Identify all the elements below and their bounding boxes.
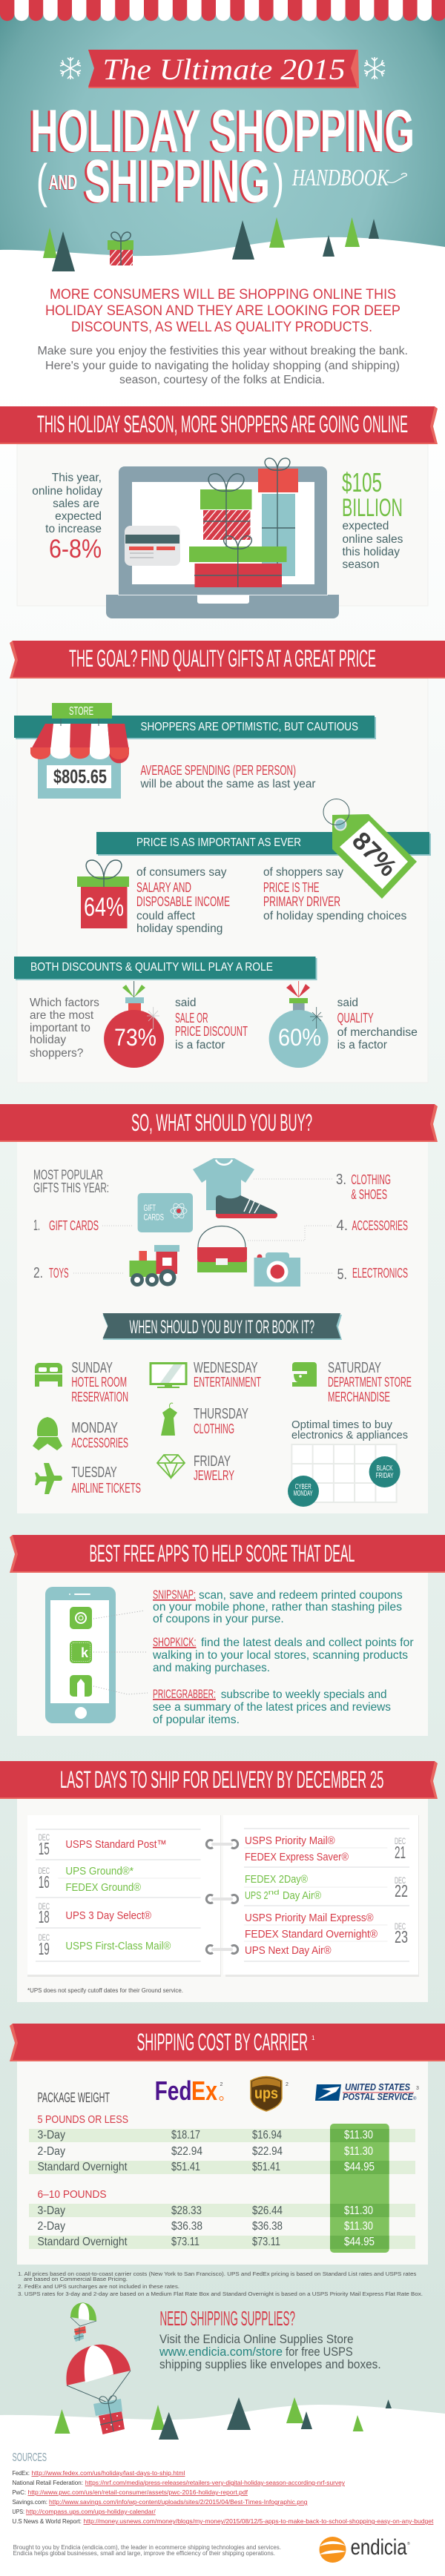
text: price primary driver: of holiday spending choices (263, 910, 407, 922)
icon: large parachute (66, 2345, 131, 2434)
calendar rings (206, 1840, 238, 1953)
text: price primary driver: of shoppers say (263, 866, 343, 879)
table: 5 pounds or less: 5 POUNDS OR LESS (37, 2114, 128, 2126)
item: gift cards: GIFT CARDS (49, 1218, 99, 1233)
day: sunday: RESERVATION (71, 1390, 128, 1404)
logo: endicia (319, 2535, 410, 2563)
item: clothing and shoes: 3. (336, 1172, 346, 1188)
item: clothing and shoes: CLOTHING (351, 1172, 391, 1187)
text: shopkick: walking in to your local stores, scanning products (152, 1649, 408, 1662)
item: toys (33, 1265, 125, 1281)
text: snipsnap (153, 1588, 403, 1625)
sources list: Savings.com: (12, 2498, 47, 2506)
day: thursday: CLOTHING (194, 1421, 234, 1436)
day: monday: MONDAY (71, 1420, 118, 1436)
table: 6-10 pounds: $44.95 (344, 2236, 375, 2248)
day: friday: JEWELRY (194, 1468, 234, 1483)
table: 5 pounds or less: $51.41 (171, 2161, 200, 2173)
sources list: PwC: (12, 2489, 26, 2496)
text: price primary driver: PRICE IS THE (263, 880, 319, 895)
text: pricegrabber: subscribe to weekly specials and (221, 1688, 387, 1701)
bar: discounts and quality (14, 957, 317, 980)
footer snow hill (0, 2405, 445, 2576)
text: quality: said (337, 997, 358, 1009)
footnotes: pricing: are based on Commercial Base Pricing. (24, 2276, 128, 2282)
text: which factors (30, 997, 99, 1060)
bar: discounts and quality: BOTH DISCOUNTS & QUALITY WILL PLAY A ROLE (30, 961, 273, 974)
text: salary and income (136, 866, 230, 935)
logo: usps: UNITED STATES (345, 2081, 410, 2093)
table: 5 pounds or less: $18.17 (171, 2129, 200, 2141)
title: AND (49, 171, 77, 194)
footnotes: pricing: 1. All prices based on coast-to-coast carrier costs (New York to San Francisco). UPS and FedEx pricing is based on Standard List rates and USPS rates (18, 2270, 417, 2277)
callout: shipping supplies: Visit the Endicia Online Supplies Store (159, 2332, 353, 2346)
shipping services left: USPS First-Class Mail® (65, 1940, 171, 1952)
dec dates left (39, 1832, 50, 1958)
logo: usps: ® (413, 2096, 417, 2101)
logo: endicia: ® (407, 2541, 410, 2546)
header scene (0, 0, 445, 276)
icon: dress (161, 1403, 179, 1436)
logo: ups (251, 2076, 289, 2111)
badge: cyber monday (288, 1476, 319, 1507)
icon: bed (35, 1363, 62, 1387)
footnotes: pricing: 3. USPS rates for 3-day and 2-day are based on a Medium Flat Rate Box and Standard Overnight is based on a USPS Priority Mail Express Flat Rate Box. (18, 2291, 423, 2297)
ribbon heading: shipping cost: 1 (312, 2035, 315, 2041)
ribbon heading: going online (0, 406, 438, 444)
icon: purse (197, 1226, 247, 1272)
day: friday: FRIDAY (194, 1453, 231, 1470)
text: sales increase: expected (55, 510, 102, 523)
panel: best free apps (17, 1573, 428, 1736)
text: sales increase (32, 472, 102, 535)
text: sale or discount: PRICE DISCOUNT (175, 1024, 248, 1039)
dec dates right: DEC (395, 1921, 406, 1932)
tree cluster left (43, 228, 75, 271)
intro text (37, 345, 408, 386)
shipping services right: UPS Next Day Air® (245, 1944, 332, 1957)
panel: online shoppers (17, 444, 428, 618)
icon: gift card: GIFT (144, 1203, 156, 1213)
icon: price tag 87% (323, 799, 417, 899)
bar: price important (96, 832, 431, 856)
dotted connectors (93, 1611, 148, 1694)
icon: monitor (151, 1363, 186, 1388)
gift on snow (108, 232, 134, 265)
text: brought to you by: Endicia helps global businesses, small and large, improve the efficiency of their shipping operations. (13, 2550, 275, 2557)
banner: the ultimate 2015: The Ultimate 2015 (102, 53, 346, 86)
dec dates left: DEC (39, 1832, 50, 1843)
logo: fedex: Ex (191, 2075, 217, 2106)
table: 6-10 pounds: $36.38 (252, 2220, 283, 2233)
intro text: season, courtesy of the folks at Endicia. (119, 374, 325, 386)
callout: shipping supplies (159, 2307, 381, 2371)
text: sales increase: to increase (45, 523, 102, 535)
table: 5 pounds or less (37, 2114, 375, 2173)
shipping services right: UPS 2 (245, 1889, 268, 1902)
icon: snowflake right (364, 57, 385, 79)
panel: quality gifts (14, 678, 431, 1083)
icon: camera (254, 1252, 300, 1287)
item: gift cards: 1. (33, 1218, 40, 1234)
sources heading: SOURCES (12, 2451, 47, 2464)
table: 5 pounds or less: Standard Overnight (37, 2161, 128, 2173)
shipping services left (65, 1838, 171, 1952)
table: 6-10 pounds: 3-Day (37, 2205, 65, 2217)
table: 6-10 pounds: $11.30 (344, 2205, 373, 2217)
sources list (12, 2469, 434, 2525)
table: 6-10 pounds: $11.30 (344, 2220, 373, 2233)
footnote: ups cutoff: *UPS does not specify cutoff dates for their Ground service. (27, 1987, 183, 1994)
table: 6-10 pounds (37, 2189, 375, 2248)
calendar pages (27, 1815, 419, 1977)
stat: $105 billion (342, 467, 403, 522)
logo: usps (315, 2081, 419, 2102)
text: snipsnap: on your mobile phone, rather than stashing piles (153, 1601, 402, 1614)
stat: 6-8%: 6-8% (49, 535, 102, 564)
text: expected online sales: season (343, 558, 379, 571)
table: 6-10 pounds: $73.11 (252, 2236, 280, 2248)
badge: black friday (369, 1456, 400, 1487)
text: quality: is a factor (337, 1039, 387, 1051)
text: pricegrabber (153, 1687, 391, 1726)
sources list: FedEx: (12, 2469, 30, 2477)
day: tuesday: TUESDAY (71, 1464, 117, 1481)
awning (0, 0, 445, 22)
table: 5 pounds or less: 3-Day (37, 2129, 65, 2141)
table: 6-10 pounds: 2-Day (37, 2220, 65, 2233)
text: optimal times: Optimal times to buy (291, 1419, 393, 1431)
text: optimal times (291, 1419, 408, 1441)
snow hill (0, 237, 445, 276)
table: 6-10 pounds: Standard Overnight (37, 2236, 128, 2248)
panel: what should you buy (17, 1142, 428, 1513)
item: toys: TOYS (49, 1266, 69, 1281)
text: snipsnap: of coupons in your purse. (153, 1613, 284, 1625)
text: average spending (140, 763, 316, 790)
dec dates left: DEC (39, 1866, 50, 1876)
text: expected online sales: online sales (343, 533, 403, 546)
icon: smartphone (45, 1587, 116, 1723)
table: 5 pounds or less: 2-Day (37, 2145, 65, 2158)
text: salary and income: could affect (136, 910, 196, 922)
text: sale or discount: said (175, 997, 196, 1009)
shipping services right: FEDEX Standard Overnight® (245, 1928, 378, 1941)
icon: red ornament 73% (104, 981, 164, 1068)
text: sale or discount: is a factor (175, 1039, 225, 1051)
text: expected online sales: expected (343, 520, 389, 532)
day: wednesday (194, 1360, 261, 1390)
table: 6-10 pounds: $26.44 (252, 2205, 283, 2217)
intro text: Here's your guide to navigating the holiday shopping (and shipping) (45, 360, 400, 372)
table: 5 pounds or less: $11.30 (344, 2129, 373, 2141)
day: tuesday: AIRLINE TICKETS (71, 1481, 141, 1496)
icon: blue ornament 60% (269, 981, 329, 1068)
shipping services left: UPS 3 Day Select® (65, 1909, 151, 1922)
dec dates right: 23 (395, 1927, 408, 1946)
text: average spending: AVERAGE SPENDING (PER PERSON) (141, 763, 296, 778)
icon: snowflake left (60, 57, 81, 79)
intro heading: HOLIDAY SEASON AND THEY ARE LOOKING FOR DEEP (45, 303, 400, 319)
trees on hill (232, 217, 379, 260)
text: most popular gifts (33, 1168, 109, 1195)
shipping services right (245, 1834, 378, 1957)
icon: blue ornament 60%: 60% (278, 1024, 321, 1051)
icon: shoe (216, 1195, 277, 1218)
item: clothing and shoes (254, 1172, 391, 1202)
intro text: Make sure you enjoy the festivities this year without breaking the bank. (37, 345, 408, 357)
day: saturday: MERCHANDISE (328, 1390, 390, 1404)
icon: airplane (35, 1463, 62, 1494)
text: salary and income: holiday spending (136, 922, 222, 935)
icon: gift 64% (77, 860, 129, 928)
logo: ups: 2 (286, 2082, 289, 2087)
icon: diamond (157, 1455, 185, 1478)
text: which factors: shoppers? (30, 1047, 84, 1060)
dec dates left: 18 (39, 1907, 50, 1926)
table: 6-10 pounds: $36.38 (171, 2220, 202, 2233)
item: electronics: ELECTRONICS (352, 1266, 408, 1281)
icon: t-shirt (193, 1158, 254, 1210)
day: thursday: THURSDAY (194, 1406, 248, 1422)
icon: gift 64%: 64% (84, 893, 124, 922)
icon: mixer (292, 1362, 317, 1387)
text: average spending: will be about the same as last year (140, 778, 316, 790)
day: saturday: SATURDAY (328, 1360, 381, 1376)
title (28, 98, 415, 216)
table bands (29, 2129, 415, 2249)
badge: black friday: BLACK (377, 1464, 393, 1473)
sources list: UPS: (12, 2508, 24, 2515)
callout: shipping supplies: NEED SHIPPING SUPPLIES? (160, 2307, 295, 2330)
text: sales increase: sales are (53, 498, 99, 510)
shipping services right: FEDEX Express Saver® (245, 1851, 349, 1863)
badge: black friday: FRIDAY (376, 1472, 394, 1480)
day: monday: ACCESSORIES (71, 1436, 128, 1450)
ribbon heading: shipping cost (10, 2024, 445, 2061)
bar: price important: PRICE IS AS IMPORTANT AS EVER (136, 836, 301, 849)
item: accessories: 4. (337, 1218, 348, 1234)
text: salary and income: DISPOSABLE INCOME (136, 894, 230, 909)
sources list: U.S News & World Report: (12, 2517, 82, 2525)
intro heading: MORE CONSUMERS WILL BE SHOPPING ONLINE THIS (50, 286, 396, 303)
panel: last days to ship (17, 1799, 428, 2002)
icon: stacked gifts (189, 458, 298, 587)
ribbon heading: what should you buy (0, 1104, 438, 1142)
icon: small parachute (70, 2302, 96, 2342)
text: price primary driver: PRIMARY DRIVER (263, 894, 340, 909)
item: electronics (305, 1266, 408, 1283)
chart: shopping calendar (288, 1444, 400, 1507)
icon: gift card: CARDS (144, 1212, 164, 1223)
day: friday (194, 1453, 234, 1483)
icon: laptop (106, 466, 339, 618)
ribbon heading: last days to ship (0, 1761, 438, 1799)
icon: store (30, 703, 129, 799)
day: sunday: HOTEL ROOM (71, 1375, 127, 1390)
shipping services left: UPS Ground®* (65, 1865, 134, 1877)
logo: usps: POSTAL SERVICE (343, 2091, 413, 2102)
intro heading (45, 286, 400, 335)
shipping services right: USPS Priority Mail Express® (245, 1912, 374, 1924)
dec dates left: 19 (39, 1939, 50, 1958)
shipping services right: Day Air® (283, 1889, 321, 1902)
text: shopkick (152, 1635, 414, 1674)
text: shopkick: find the latest deals and collect points for (201, 1637, 414, 1649)
text: which factors: are the most (30, 1009, 94, 1022)
text: sales increase: This year, (52, 472, 102, 484)
shipping services right: FEDEX 2Day® (245, 1873, 308, 1886)
icon: hat and scarf (33, 1417, 62, 1450)
text: sale or discount: SALE OR (175, 1011, 208, 1026)
panel: shipping cost table (17, 2061, 428, 2265)
day: wednesday: ENTERTAINMENT (194, 1375, 261, 1390)
day: sunday: SUNDAY (71, 1360, 113, 1376)
stat: $105 billion: BILLION (342, 494, 403, 522)
text: expected online sales: this holiday (343, 546, 400, 558)
text: quality: QUALITY (337, 1011, 374, 1026)
item: clothing and shoes: & SHOES (351, 1187, 387, 1202)
text: most popular gifts: MOST POPULAR (33, 1168, 103, 1183)
text: pricegrabber: of popular items. (153, 1714, 240, 1726)
logo: fedex: 2 (220, 2082, 222, 2087)
table header label: PACKAGE WEIGHT (37, 2090, 110, 2105)
dec dates right (395, 1836, 408, 1946)
day: tuesday (71, 1464, 141, 1496)
text: sale or discount (175, 997, 248, 1051)
shipping services right: nd (268, 1889, 280, 1896)
text: snipsnap: scan, save and redeem printed coupons (199, 1589, 403, 1602)
table: 5 pounds or less: $51.41 (252, 2161, 280, 2173)
title: ) (273, 154, 284, 208)
callout: shipping supplies: shipping supplies like envelopes and boxes. (159, 2357, 381, 2371)
title: SHIPPING (85, 148, 270, 215)
sources list: http://money.usnews.com/money/blogs/my-money/2015/08/12/5-apps-to-make-back-to-school-shopping-easy-on-any-budget (83, 2517, 434, 2525)
logo: usps: 3 (416, 2086, 419, 2091)
text: sales increase: online holiday (32, 485, 102, 498)
icon: toy train (129, 1245, 179, 1287)
title: SHIPPING (82, 148, 268, 216)
logo: fedex: Fed (155, 2075, 192, 2106)
dec dates right: 21 (395, 1843, 406, 1862)
callout: shipping supplies: for free USPS (286, 2345, 353, 2359)
highlight column: usps (330, 2124, 389, 2253)
text: most popular gifts: GIFTS THIS YEAR: (33, 1180, 109, 1195)
dec dates left: 15 (39, 1839, 50, 1858)
icon: store: STORE (69, 705, 93, 718)
text: snipsnap: SNIPSNAP: (153, 1588, 196, 1602)
intro heading: DISCOUNTS, AS WELL AS QUALITY PRODUCTS. (71, 319, 372, 335)
sources list: http://www.fedex.com/us/holiday/last-days-to-ship.html (31, 2469, 185, 2477)
item: accessories (248, 1218, 408, 1241)
callout: shipping supplies: www.endicia.com/store (159, 2345, 283, 2359)
title: AND (48, 171, 76, 194)
dec dates right: DEC (395, 1875, 406, 1886)
text: which factors: holiday (30, 1034, 66, 1046)
table: 5 pounds or less: $11.30 (344, 2145, 373, 2158)
logo: fedex (155, 2075, 223, 2106)
sources list: http://compass.ups.com/ups-holiday-calendar/ (26, 2508, 156, 2515)
footnotes: pricing (18, 2270, 423, 2297)
sources list: http://www.pwc.com/us/en/retail-consumer/assets/pwc-2016-holiday-report.pdf (28, 2489, 248, 2496)
day: sunday (71, 1360, 128, 1404)
table: 5 pounds or less: $44.95 (344, 2161, 375, 2173)
text: shopkick: and making purchases. (153, 1662, 270, 1674)
text: expected online sales (343, 520, 403, 571)
dec dates left: DEC (39, 1901, 50, 1912)
day: monday (71, 1420, 128, 1450)
ribbon heading: best free apps (10, 1535, 445, 1573)
text: which factors: important to (30, 1022, 90, 1034)
table: 5 pounds or less: $22.94 (252, 2145, 283, 2158)
dec dates left: DEC (39, 1932, 50, 1943)
logo: endicia: endicia (351, 2535, 407, 2560)
text: brought to you by (13, 2544, 281, 2557)
table: 5 pounds or less: $22.94 (171, 2145, 202, 2158)
table: 6-10 pounds: 6–10 POUNDS (37, 2189, 107, 2201)
trees: footer (55, 2397, 392, 2440)
shipping services right: USPS Priority Mail® (245, 1834, 335, 1847)
icon: smartphone: k (81, 1645, 89, 1660)
text: pricegrabber: PRICEGRABBER: (153, 1687, 216, 1701)
badge: cyber monday: MONDAY (294, 1490, 313, 1498)
footnotes: pricing: 2. FedEx and UPS surcharges are not included in these rates. (18, 2283, 179, 2290)
text: optimal times: electronics & appliances (291, 1430, 408, 1441)
sources list: https://nrf.com/media/press-releases/retailers-very-digital-holiday-season-according-nrf-survey (85, 2479, 346, 2486)
day: thursday (194, 1406, 248, 1436)
text: price primary driver (263, 866, 407, 922)
shipping services left: USPS Standard Post™ (65, 1838, 167, 1851)
text: which factors: Which factors (30, 997, 99, 1009)
title: ( (36, 154, 47, 208)
bar: shoppers optimistic: SHOPPERS ARE OPTIMISTIC, BUT CAUTIOUS (141, 721, 358, 733)
ribbon heading: the goal (10, 641, 445, 678)
bar: shoppers optimistic (14, 716, 376, 739)
text: quality (337, 997, 418, 1051)
dec dates left: 16 (39, 1872, 50, 1892)
icon: price tag 87%: 87% (346, 827, 402, 882)
icon: red ornament 73%: 73% (114, 1024, 156, 1051)
icon: credit card (125, 526, 180, 566)
sources list: National Retail Federation: (12, 2479, 83, 2486)
text: salary and income: SALARY AND (136, 880, 191, 895)
icon: gift card (138, 1193, 193, 1232)
ribbon: when should you buy (102, 1313, 342, 1340)
text: brought to you by: Brought to you by Endicia (endicia.com), the leader in ecommerce shipping technologies and services. (13, 2544, 281, 2551)
dec dates right: DEC (395, 1836, 406, 1846)
icon: store: $805.65 (53, 765, 107, 787)
stat: $105 billion: $105 (342, 467, 382, 498)
item: toys: 2. (33, 1265, 43, 1281)
day: saturday (328, 1360, 412, 1404)
table: 5 pounds or less: $16.94 (252, 2129, 282, 2141)
table: 6-10 pounds: $73.11 (171, 2236, 200, 2248)
item: electronics: 5. (337, 1266, 347, 1283)
text: shopkick: SHOPKICK: (153, 1635, 196, 1649)
logo: ups: ups (254, 2085, 278, 2102)
badge: cyber monday: CYBER (295, 1483, 312, 1491)
table: 6-10 pounds: $28.33 (171, 2205, 202, 2217)
text: pricegrabber: see a summary of the latest prices and reviews (153, 1701, 391, 1714)
sources list: http://www.savings.com/info/wp-content/uploads/sites/2/2015/04/Best-Times-Infographic.png (49, 2498, 308, 2506)
day: wednesday: WEDNESDAY (194, 1360, 258, 1376)
text: quality: of merchandise (337, 1026, 418, 1039)
shipping services left: FEDEX Ground® (65, 1881, 141, 1894)
handbook script: HANDBOOK (291, 164, 389, 191)
text: salary and income: of consumers say (136, 866, 227, 879)
dec dates right: 22 (395, 1881, 408, 1900)
